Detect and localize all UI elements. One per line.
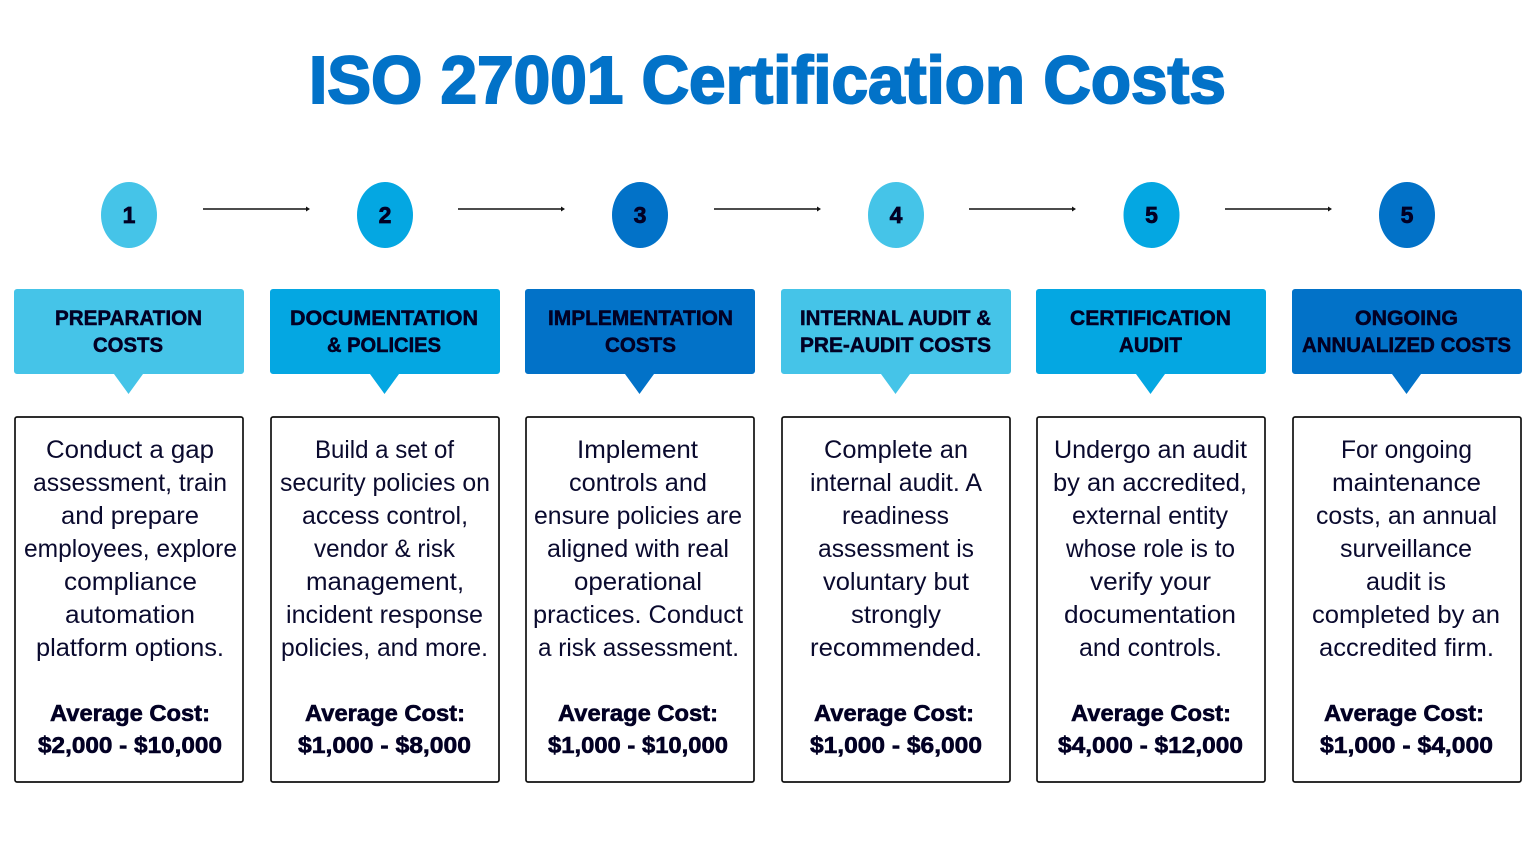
panel: implementation details: $1,000 - $10,000 (548, 732, 728, 758)
header: documentation and policies: DOCUMENTATION (290, 307, 478, 330)
header: certification audit (1036, 289, 1266, 394)
step marker 3: 3 (634, 202, 646, 228)
panel: preparation details: compliance (64, 568, 197, 596)
arrow 2 to 3 (458, 206, 565, 212)
panel: documentation details: Build a set of (315, 436, 454, 464)
panel: documentation details: Average Cost: (305, 700, 465, 726)
panel: ongoing cost details: For ongoing (1341, 436, 1472, 464)
panel: preparation details: $2,000 - $10,000 (38, 732, 222, 758)
panel: internal audit details: voluntary but (823, 568, 969, 596)
header: certification audit: AUDIT (1119, 334, 1182, 357)
panel: ongoing cost details: Average Cost: (1324, 700, 1484, 726)
panel: preparation details: and prepare (61, 502, 199, 530)
step marker 2 (357, 182, 413, 248)
step marker 3 (612, 182, 668, 248)
panel: preparation details: assessment, train (33, 469, 227, 497)
panel: ongoing cost details: $1,000 - $4,000 (1320, 732, 1493, 758)
header: implementation costs (525, 289, 755, 394)
panel: ongoing cost details (1293, 417, 1521, 782)
panel: documentation details: policies, and more. (281, 634, 488, 662)
step marker 5 (1124, 182, 1180, 248)
panel: ongoing cost details: surveillance (1340, 535, 1472, 563)
panel: implementation details: ensure policies are (534, 502, 742, 530)
step marker 2: 2 (379, 202, 391, 228)
panel: ongoing cost details: costs, an annual (1316, 502, 1497, 530)
header: implementation costs: IMPLEMENTATION (548, 307, 733, 330)
panel: internal audit details: recommended. (810, 634, 982, 662)
panel: preparation details: Average Cost: (50, 700, 210, 726)
panel: internal audit details: Average Cost: (814, 700, 974, 726)
step marker 5: 5 (1145, 202, 1158, 228)
arrow 3 to 4 (714, 206, 821, 212)
panel: internal audit details: readiness (842, 502, 949, 530)
panel: documentation details: vendor & risk (314, 535, 455, 563)
arrow 4 to 5 (969, 206, 1076, 212)
panel: internal audit details: assessment is (818, 535, 974, 563)
panel: certification audit details (1037, 417, 1265, 782)
step marker 1: 1 (123, 202, 136, 228)
panel: preparation details: automation (65, 601, 195, 629)
header: ongoing annualized costs (1292, 289, 1522, 394)
header: preparation costs (14, 289, 244, 394)
header: certification audit: CERTIFICATION (1070, 307, 1231, 330)
panel: implementation details: Implement (577, 436, 698, 464)
step marker 4 (868, 182, 924, 248)
panel: certification audit details: Undergo an audit (1054, 436, 1247, 464)
header: preparation costs: COSTS (93, 334, 163, 357)
header: ongoing annualized costs: ONGOING (1355, 307, 1458, 330)
panel: preparation details: Conduct a gap (46, 436, 214, 464)
panel: preparation details: employees, explore (24, 535, 237, 563)
panel: internal audit details: $1,000 - $6,000 (810, 732, 982, 758)
header: documentation and policies (270, 289, 500, 394)
panel: certification audit details: $4,000 - $12,000 (1058, 732, 1243, 758)
panel: certification audit details: and controls. (1079, 634, 1222, 662)
header: internal audit and pre-audit costs: PRE-AUDIT COSTS (800, 334, 991, 357)
panel: internal audit details: Complete an (824, 436, 968, 464)
panel: implementation details: Average Cost: (558, 700, 718, 726)
panel: documentation details: $1,000 - $8,000 (298, 732, 471, 758)
arrow 1 to 2 (203, 206, 310, 212)
panel: internal audit details: internal audit. A (810, 469, 982, 497)
step marker 6 (1379, 182, 1435, 248)
panel: certification audit details: whose role is to (1065, 535, 1235, 563)
panel: certification audit details: verify your (1090, 568, 1211, 596)
header: documentation and policies: & POLICIES (327, 334, 441, 357)
panel: implementation details: practices. Conduct (533, 601, 743, 629)
header: implementation costs: COSTS (605, 334, 676, 357)
panel: implementation details: operational (574, 568, 702, 596)
panel: internal audit details: strongly (851, 601, 942, 629)
header: internal audit and pre-audit costs: INTERNAL AUDIT & (800, 307, 991, 330)
step marker 6: 5 (1401, 202, 1414, 228)
panel: ongoing cost details: accredited firm. (1319, 634, 1494, 662)
panel: implementation details (526, 417, 754, 782)
panel: implementation details: a risk assessment. (538, 634, 739, 662)
panel: documentation details: management, (306, 568, 464, 596)
panel: documentation details: incident response (286, 601, 483, 629)
panel: ongoing cost details: maintenance (1332, 469, 1481, 497)
panel: internal audit details (782, 417, 1010, 782)
panel: certification audit details: external entity (1072, 502, 1229, 530)
header: preparation costs: PREPARATION (55, 307, 202, 330)
panel: documentation details: security policies on (280, 469, 490, 497)
header: internal audit and pre-audit costs (781, 289, 1011, 394)
panel: preparation details (15, 417, 243, 782)
panel: ongoing cost details: completed by an (1312, 601, 1500, 629)
panel: ongoing cost details: audit is (1366, 568, 1446, 596)
panel: preparation details: platform options. (36, 634, 224, 662)
step marker 4: 4 (890, 202, 903, 228)
panel: documentation details (271, 417, 499, 782)
panel: certification audit details: by an accredited, (1053, 469, 1247, 497)
panel: certification audit details: documentation (1064, 601, 1236, 629)
panel: certification audit details: Average Cost: (1071, 700, 1231, 726)
panel: documentation details: access control, (302, 502, 468, 530)
arrow 5 to 6 (1225, 206, 1332, 212)
panel: implementation details: aligned with real (547, 535, 729, 563)
title: ISO 27001 Certification Costs (309, 43, 1226, 118)
panel: implementation details: controls and (569, 469, 707, 497)
header: ongoing annualized costs: ANNUALIZED COSTS (1302, 334, 1511, 357)
step marker 1 (101, 182, 157, 248)
